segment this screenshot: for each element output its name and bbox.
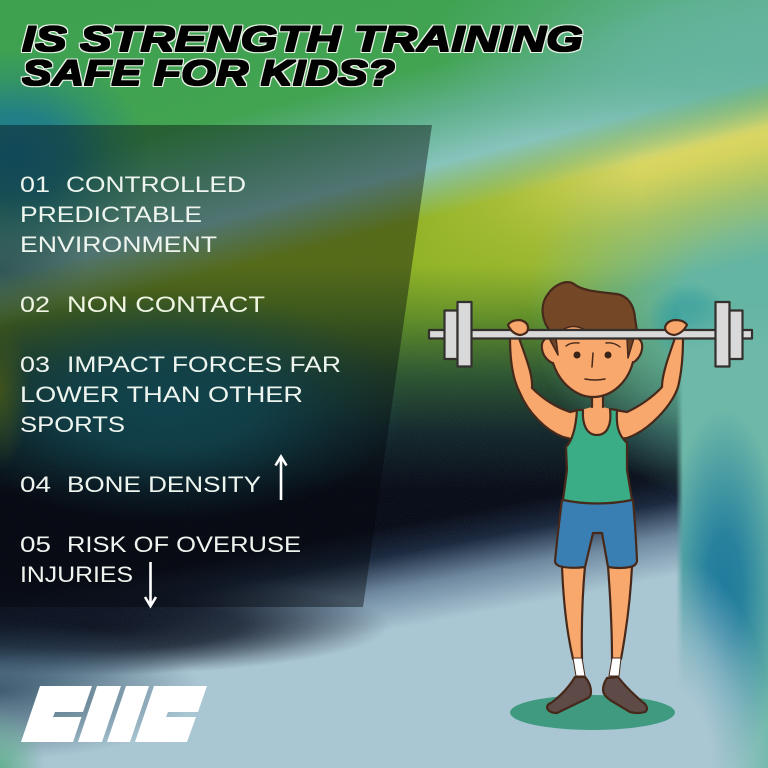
panel: text background xyxy=(0,125,432,607)
list: item 01: 01 xyxy=(20,172,50,197)
icon: down arrow xyxy=(145,562,156,606)
list: item 05: 05 xyxy=(20,532,51,557)
hair xyxy=(543,282,637,331)
list: item 05: INJURIES xyxy=(20,562,133,587)
title: IS STRENGTH TRAINING xyxy=(22,20,583,59)
list: item 02 xyxy=(20,292,265,317)
list: item 03: IMPACT FORCES FAR xyxy=(67,352,341,377)
icon: up arrow xyxy=(276,456,286,500)
list: item 04: 04 xyxy=(20,472,51,497)
barbell xyxy=(429,302,752,366)
shorts xyxy=(555,500,637,568)
list: item 04: BONE DENSITY xyxy=(67,472,261,497)
list: item 01: CONTROLLED xyxy=(66,172,246,197)
face xyxy=(550,330,635,397)
title xyxy=(22,20,583,93)
sideburns xyxy=(549,338,634,358)
list: item 01: ENVIRONMENT xyxy=(20,232,217,257)
eyes, brows, nose, mouth xyxy=(566,343,620,380)
list: item 01 xyxy=(20,172,246,257)
ears xyxy=(542,337,642,364)
title: SAFE FOR KIDS? xyxy=(22,54,395,93)
arms xyxy=(510,338,683,440)
illustration: boy lifting barbell xyxy=(429,282,752,713)
list: item 02: NON CONTACT xyxy=(67,292,265,317)
shoes xyxy=(547,677,647,713)
list: item 02: 02 xyxy=(20,292,50,317)
list: item 01: PREDICTABLE xyxy=(20,202,202,227)
forehead xyxy=(561,326,587,331)
list: item 03: SPORTS xyxy=(20,412,125,437)
hands xyxy=(508,320,687,335)
list: item 03 xyxy=(20,352,341,437)
list: item 05: RISK OF OVERUSE xyxy=(67,532,301,557)
logo xyxy=(21,686,207,742)
illustration: ground shadow xyxy=(510,695,675,730)
list: item 03: 03 xyxy=(20,352,50,377)
list: item 03: LOWER THAN OTHER xyxy=(20,382,303,407)
socks xyxy=(573,658,621,676)
list: item 05 xyxy=(20,532,301,587)
tank top xyxy=(563,409,632,504)
list: item 04 xyxy=(20,472,261,497)
neck and chest xyxy=(575,394,620,441)
legs xyxy=(562,566,632,659)
